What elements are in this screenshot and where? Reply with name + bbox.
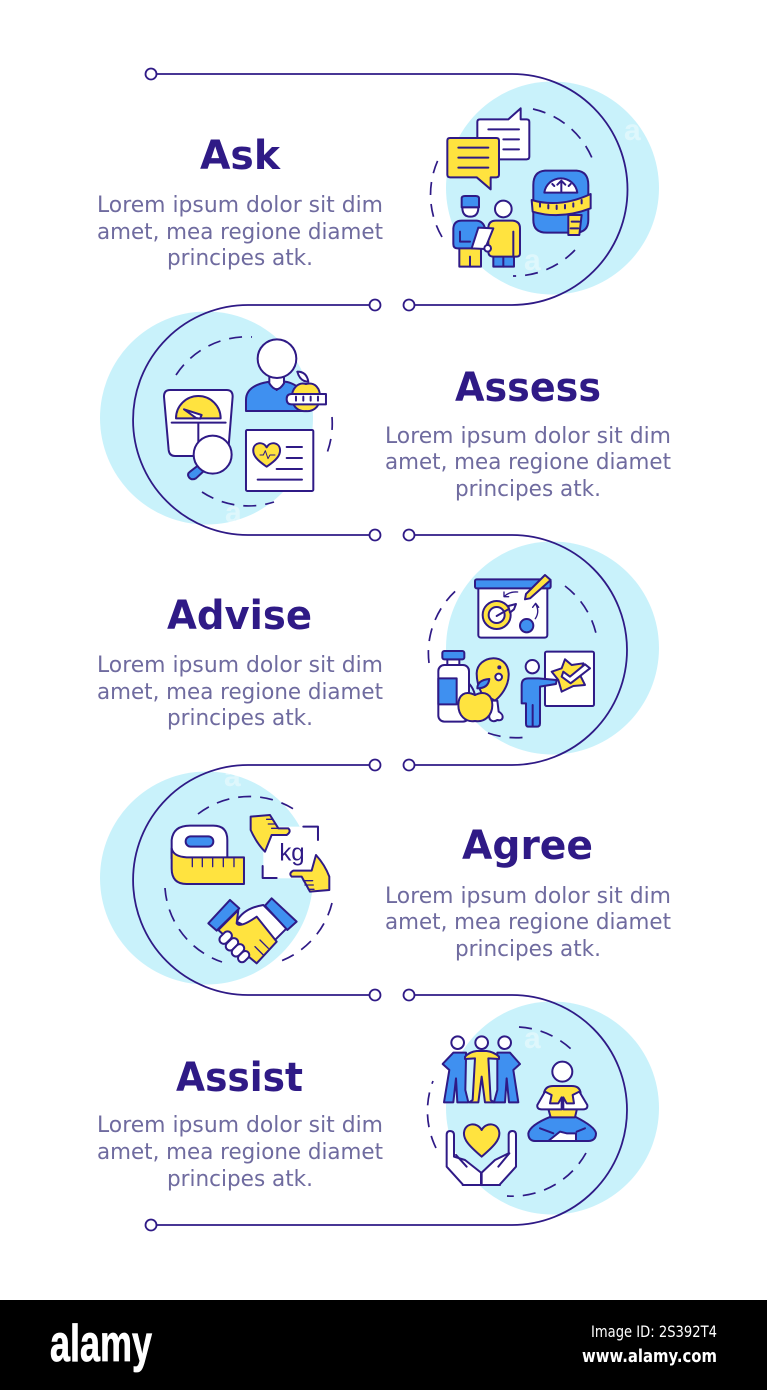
- agree text: Lorem ipsum dolor sit dim: [385, 884, 671, 909]
- assist dashed ring: [427, 1027, 586, 1196]
- assist text: amet, mea regione diamet: [97, 1140, 383, 1165]
- panel: ask: [97, 74, 659, 305]
- text: a: [624, 114, 641, 147]
- ask connector outline: [151, 74, 628, 305]
- assist heading: Assist: [176, 1055, 303, 1101]
- assess text: amet, mea regione diamet: [385, 450, 671, 475]
- ask heading: Ask: [200, 133, 281, 179]
- panel: agree: [100, 765, 671, 995]
- ask text: amet, mea regione diamet: [97, 220, 383, 245]
- ask text: [97, 193, 383, 271]
- assess connector outline: [133, 305, 375, 535]
- assist connector outline: [151, 995, 627, 1225]
- assist text: [97, 1113, 383, 1192]
- icon: consultation and weight: [447, 108, 591, 267]
- advise connector outline: [409, 535, 627, 765]
- advise text: principes atk.: [167, 706, 313, 731]
- ask dashed ring: [431, 109, 592, 276]
- ask background circle: [446, 82, 659, 294]
- panel: assess: [100, 305, 671, 535]
- advise text: Lorem ipsum dolor sit dim: [97, 653, 383, 678]
- text: a: [524, 244, 541, 277]
- agree text: amet, mea regione diamet: [385, 910, 671, 935]
- agree text: principes atk.: [455, 937, 601, 962]
- footer bar: [0, 1300, 767, 1390]
- assess text: [385, 424, 671, 502]
- text: a: [225, 496, 242, 529]
- text: a: [524, 1022, 541, 1055]
- icon: planning, diet and coaching: [438, 575, 594, 727]
- assess text: principes atk.: [455, 477, 601, 502]
- ask text: Lorem ipsum dolor sit dim: [97, 193, 383, 218]
- agree background circle: [100, 772, 313, 984]
- assess dashed ring: [176, 337, 332, 506]
- footer url: www.alamy.com: [582, 1346, 717, 1367]
- advise text: [97, 653, 383, 731]
- text: a: [224, 760, 241, 793]
- advise text: amet, mea regione diamet: [97, 680, 383, 705]
- panel: advise: [97, 535, 659, 765]
- icon: tape, weight and handshake: kg: [279, 840, 305, 867]
- icon: scale, nutrition and health card: [164, 339, 326, 491]
- advise background circle: [446, 542, 659, 754]
- assess heading: Assess: [455, 365, 601, 411]
- advise dashed ring: [428, 586, 597, 738]
- icon: community, meditation and care: [443, 1036, 596, 1185]
- assess background circle: [100, 312, 313, 524]
- footer logo: alamy: [50, 1315, 152, 1373]
- ask text: principes atk.: [167, 246, 313, 271]
- assist text: Lorem ipsum dolor sit dim: [97, 1113, 383, 1138]
- assist background circle: [446, 1002, 659, 1214]
- agree heading: Agree: [462, 823, 593, 869]
- agree text: [385, 884, 671, 962]
- assist text: principes atk.: [167, 1167, 313, 1192]
- assess text: Lorem ipsum dolor sit dim: [385, 424, 671, 449]
- footer image id: Image ID: 2S392T4: [591, 1322, 717, 1341]
- agree connector outline: [133, 765, 375, 995]
- connector nodes: [146, 68, 414, 1230]
- icon: tape, weight and handshake: [172, 815, 329, 964]
- advise heading: Advise: [167, 593, 312, 639]
- panel: assist: [97, 995, 659, 1225]
- agree dashed ring: [165, 796, 332, 962]
